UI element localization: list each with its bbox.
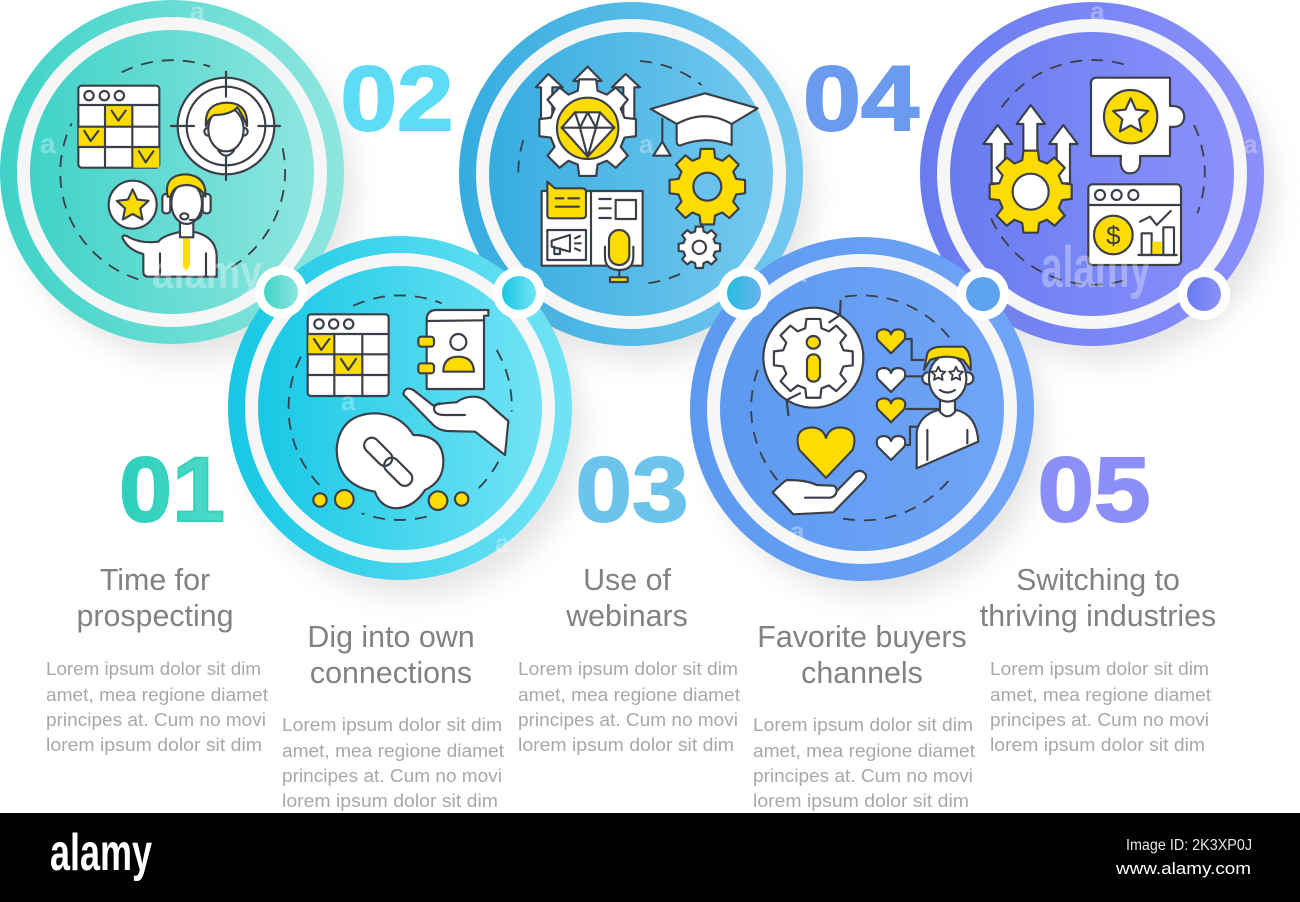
text block: step 1: lorem ipsum dolor sit dim xyxy=(46,734,262,755)
footer bar xyxy=(0,813,1300,902)
watermarks: alamy xyxy=(152,246,262,298)
text block: step 1 xyxy=(46,563,269,755)
text block: step 2: Dig into own xyxy=(307,620,475,654)
watermarks: a xyxy=(1243,129,1258,159)
watermarks: a xyxy=(790,516,805,546)
icon group: growth gear, puzzle, finance window xyxy=(983,60,1205,285)
text block: step 5: principes at. Cum no movi xyxy=(990,709,1209,730)
text block: step 5: lorem ipsum dolor sit dim xyxy=(990,734,1205,755)
text block: step 2: principes at. Cum no movi xyxy=(282,765,502,786)
icon group: schedule, target, operator xyxy=(60,60,285,279)
text block: step 4: lorem ipsum dolor sit dim xyxy=(753,790,969,811)
text block: step 4: Favorite buyers xyxy=(757,620,967,654)
text block: step 3: principes at. Cum no movi xyxy=(518,709,738,730)
connector dots xyxy=(255,266,1230,320)
text block: step 1: Lorem ipsum dolor sit dim xyxy=(46,658,261,679)
text block: step 3: lorem ipsum dolor sit dim xyxy=(518,734,734,755)
text block: step 2 xyxy=(282,620,505,811)
watermarks: a xyxy=(792,258,807,288)
watermarks: a xyxy=(40,128,56,159)
text block: step 1: Time for xyxy=(100,563,210,597)
number 03: 03 xyxy=(576,439,688,541)
text block: step 4: principes at. Cum no movi xyxy=(753,765,973,786)
number 05: 05 xyxy=(1038,439,1150,541)
text block: step 3: Use of xyxy=(583,563,671,597)
circle 3: use of webinars xyxy=(459,2,813,362)
text block: step 5: Lorem ipsum dolor sit dim xyxy=(990,658,1209,679)
number 01: 01 xyxy=(119,439,225,541)
circle 1: time for prospecting xyxy=(0,0,354,360)
number 04: 04 xyxy=(803,48,919,150)
watermarks: a xyxy=(341,386,356,416)
website: www.alamy.com xyxy=(1115,859,1251,878)
image id: Image ID: 2K3XP0J xyxy=(1126,837,1252,854)
text block: step 1: prospecting xyxy=(76,599,234,633)
text block: step 3: Lorem ipsum dolor sit dim xyxy=(518,658,738,679)
icon group: gem gear, graduation cap, gears, book, mic xyxy=(518,61,758,284)
text block: step 2: amet, mea regione diamet xyxy=(282,740,505,761)
icon group: growth gear, puzzle, finance window: $ xyxy=(1106,220,1121,250)
icon group: schedule, contacts, hand, link cloud xyxy=(289,295,512,520)
text block: step 2: connections xyxy=(310,656,472,690)
watermarks: a xyxy=(495,528,510,558)
text block: step 4: channels xyxy=(801,656,923,690)
text block: step 3 xyxy=(518,563,741,755)
text block: step 2: Lorem ipsum dolor sit dim xyxy=(282,714,502,735)
text block: step 5: Switching to xyxy=(1016,563,1180,597)
circle 2: dig into own connections xyxy=(228,236,582,596)
circle 5: switching to thriving industries xyxy=(920,2,1274,362)
text block: step 5: amet, mea regione diamet xyxy=(990,684,1212,705)
number 02: 02 xyxy=(340,48,454,150)
watermarks: a xyxy=(639,129,654,159)
icon group: info gear, hearts, buyer, hand xyxy=(751,295,978,520)
text block: step 4 xyxy=(753,620,976,811)
text block: step 5: thriving industries xyxy=(980,599,1216,633)
text block: step 3: amet, mea regione diamet xyxy=(518,684,741,705)
text block: step 2: lorem ipsum dolor sit dim xyxy=(282,790,498,811)
text block: step 4: Lorem ipsum dolor sit dim xyxy=(753,714,973,735)
watermarks xyxy=(40,0,1258,558)
text block: step 1: amet, mea regione diamet xyxy=(46,684,269,705)
text block: step 1: principes at. Cum no movi xyxy=(46,709,266,730)
watermarks: alamy xyxy=(1041,235,1151,300)
text block: step 4: amet, mea regione diamet xyxy=(753,740,976,761)
text block: step 5 xyxy=(980,563,1216,755)
circle 4: favorite buyers channels xyxy=(690,237,1044,597)
footer logo: alamy xyxy=(50,824,152,882)
text block: step 3: webinars xyxy=(565,599,688,633)
